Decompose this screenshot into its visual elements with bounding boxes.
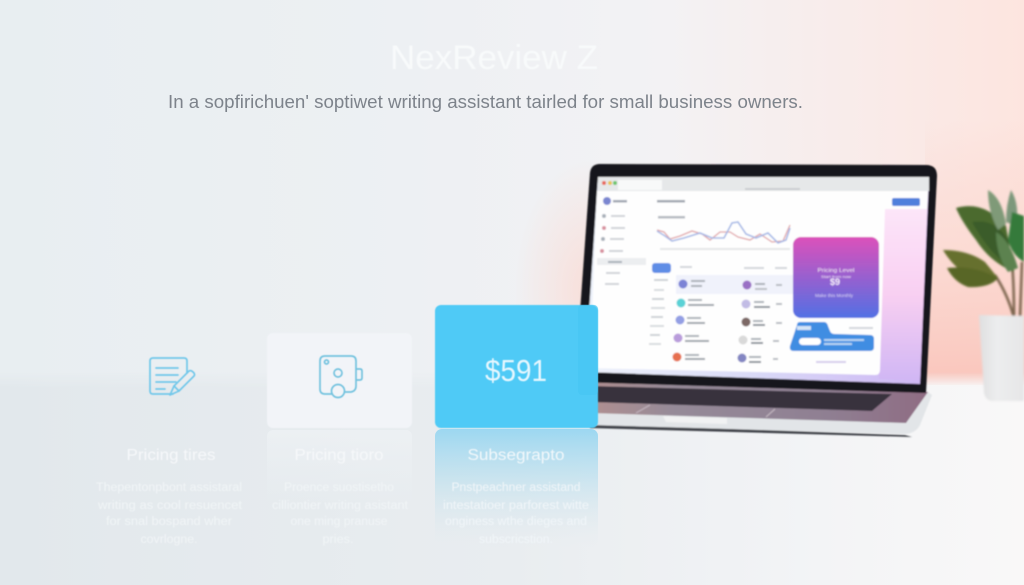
laptop (575, 164, 937, 437)
description: Proence suostisetho (284, 482, 394, 494)
description: writing as cool resuencet (97, 500, 243, 512)
icon: document with pencil (150, 358, 194, 395)
description: Pnstpeachner assistand (452, 482, 580, 494)
screen pricing card: Start from now (821, 274, 851, 279)
description: cilliontier writing asistant (272, 500, 409, 512)
screen pricing card: Make this Monthly (815, 293, 854, 298)
card: pricing tioro (267, 333, 412, 546)
app sidebar (597, 197, 685, 285)
description: Thepentonpbont assistaral (96, 482, 242, 494)
laptop screen (585, 177, 929, 384)
description (272, 482, 409, 546)
screen top button (892, 198, 920, 206)
panel (267, 333, 412, 428)
screen pricing card: Pricing Level (818, 268, 854, 274)
heading: Pricing tioro (294, 447, 384, 464)
description: covrlogne. (140, 534, 198, 546)
laptop base (590, 380, 932, 437)
description: for snal bospand wher (106, 516, 232, 528)
screen call-to-action panel (790, 322, 874, 363)
reflection (267, 430, 412, 505)
description (96, 482, 243, 546)
description: intestatioer parforest witte (443, 500, 589, 512)
plant leaves (943, 190, 1024, 287)
price: $591 (485, 353, 547, 388)
icon: rounded square with circles (320, 356, 362, 398)
screen pricing card (793, 237, 879, 318)
title: NexReview Z (390, 39, 598, 77)
description: one ming pranuse (290, 516, 388, 528)
plant stems (995, 262, 1022, 318)
heading: Pricing tires (126, 447, 216, 464)
plant pot (979, 315, 1024, 401)
description: onginess wthe dieges and (445, 516, 587, 528)
plant (943, 190, 1024, 401)
laptop lid (575, 164, 937, 393)
description: pries. (322, 534, 354, 546)
subtitle: In a sopfirichuen' soptiwet writing assistant tairled for small business owners. (168, 92, 803, 112)
panel (435, 305, 598, 428)
card: subsegrapto (435, 305, 598, 547)
screen pricing card: $9 (830, 277, 840, 287)
reflection (435, 429, 598, 547)
transaction table (649, 263, 808, 363)
description (443, 482, 589, 546)
heading: Subsegrapto (468, 447, 564, 464)
chart panel (657, 216, 790, 250)
card: pricing tiers (96, 358, 243, 546)
description: subscricstion. (479, 534, 553, 546)
